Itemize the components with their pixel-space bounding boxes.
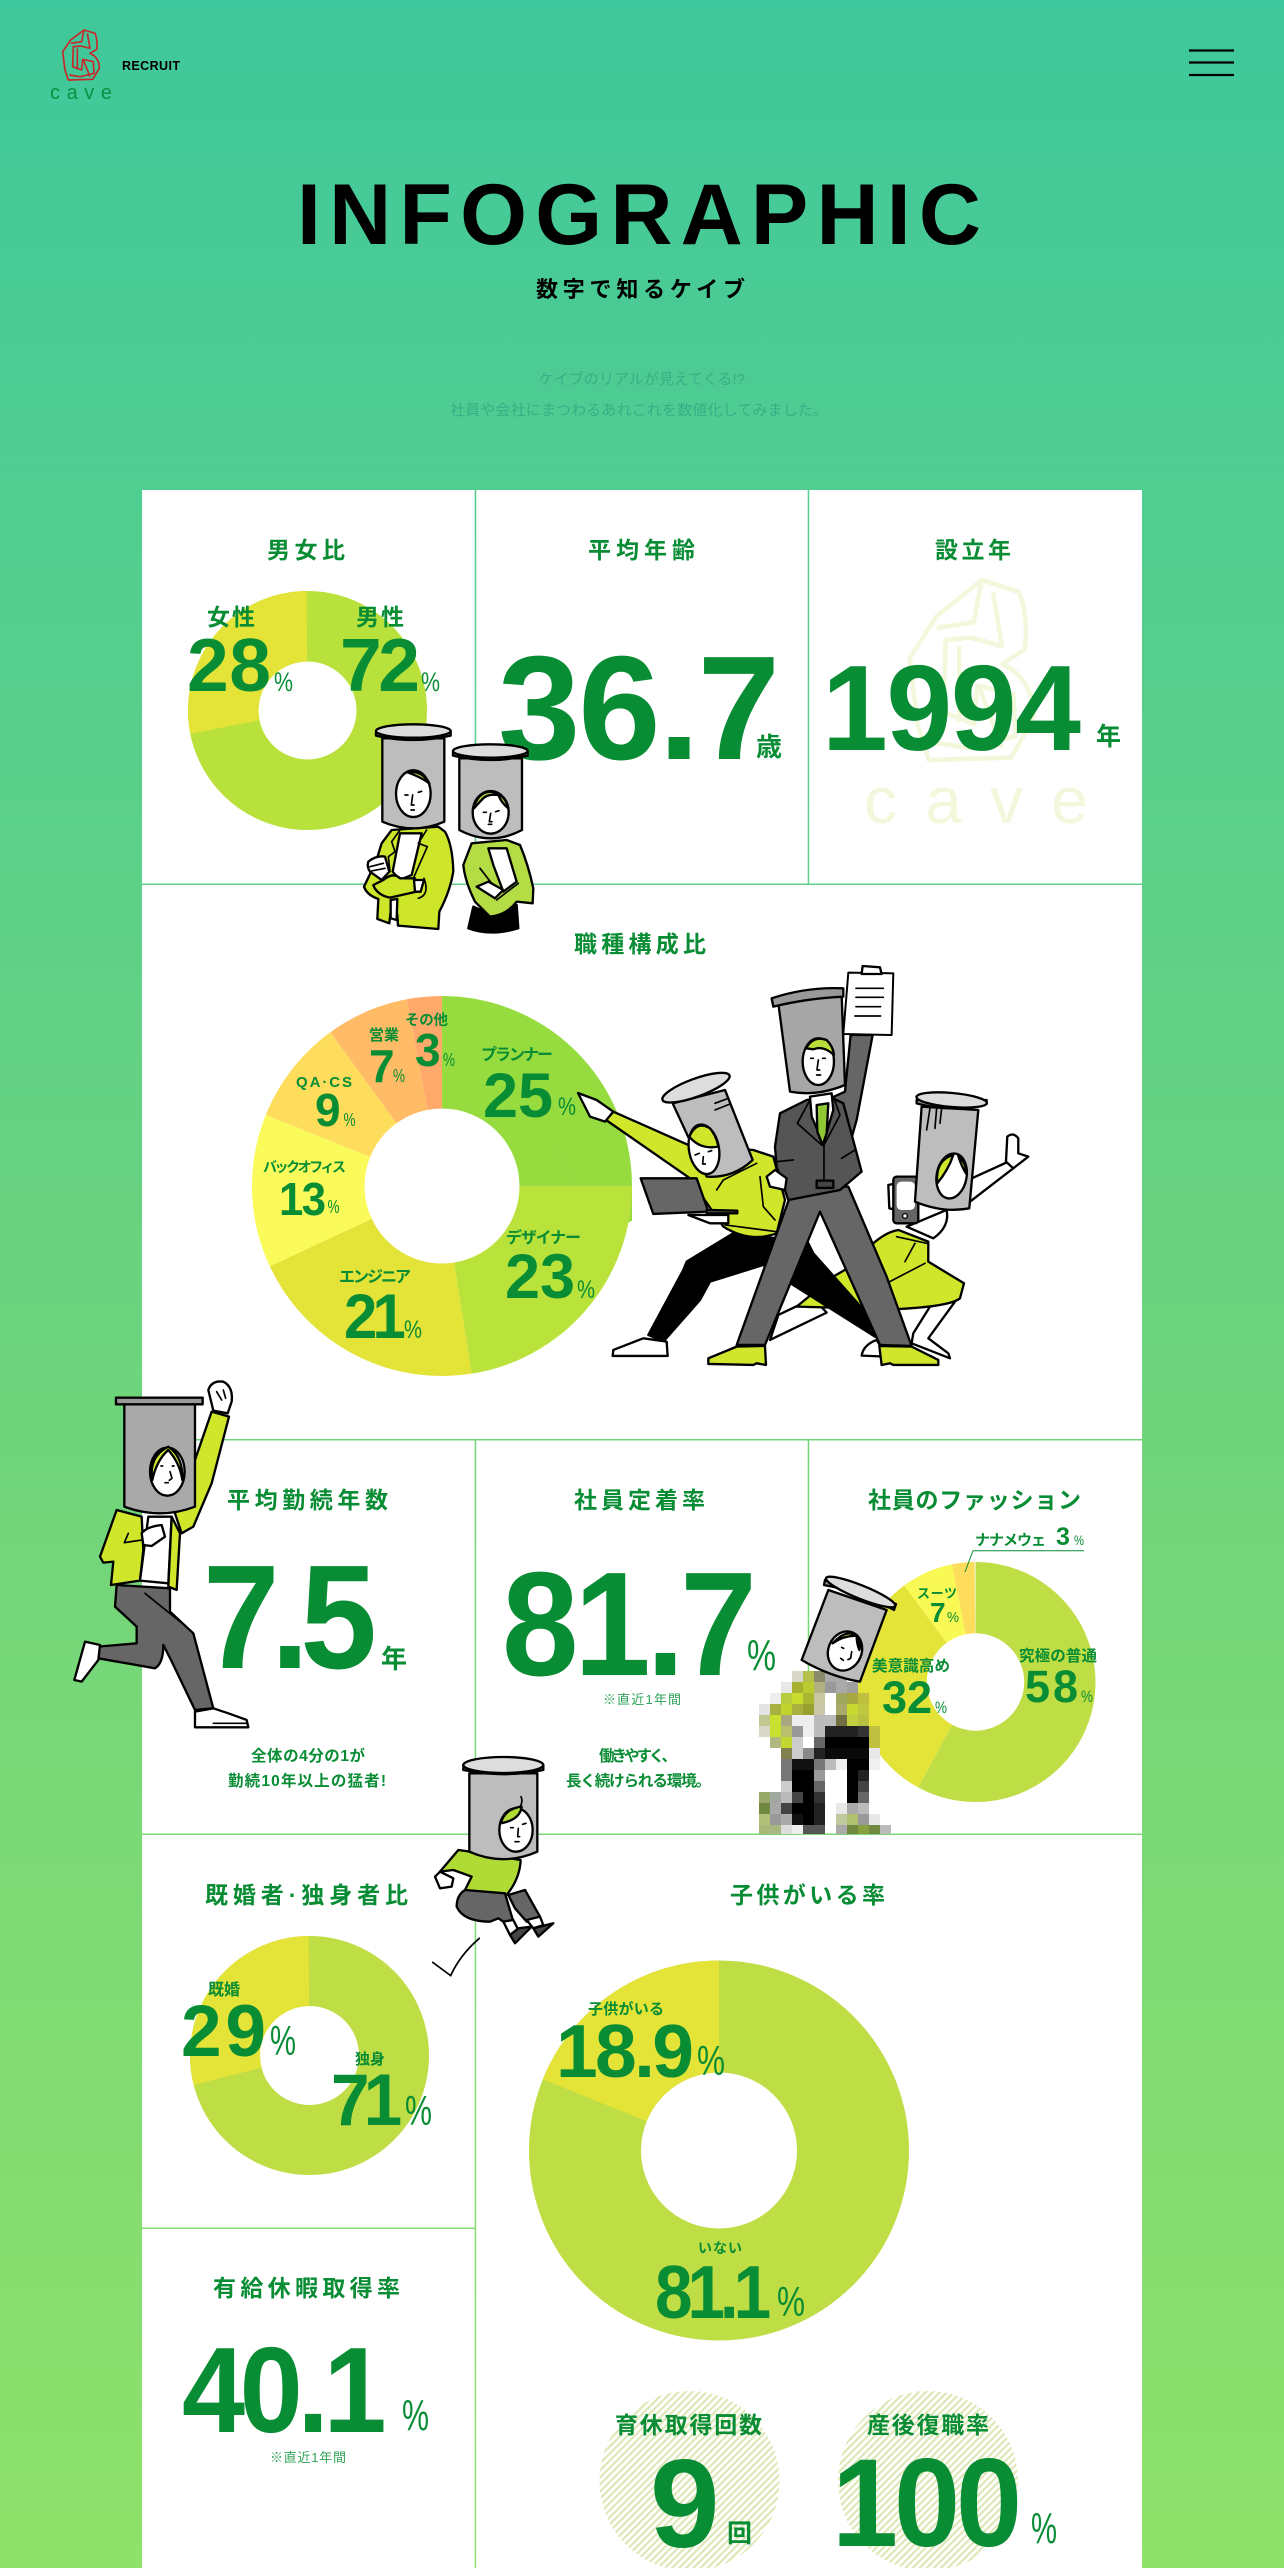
panel: children rate	[556, 1882, 885, 2335]
panel: staff fashion	[868, 1487, 1097, 1766]
label: male: %	[421, 667, 440, 697]
label: diagonal style callout: 3	[1056, 1523, 1070, 1551]
note: retention: 働きやすく、	[599, 1747, 677, 1765]
note: tenure	[228, 1746, 386, 1790]
grid lines	[142, 490, 1142, 2568]
note: retention	[566, 1747, 711, 1790]
label: married: 29	[181, 1991, 266, 2072]
label: fashion-conscious: %	[935, 1698, 947, 1717]
intro text	[450, 370, 828, 419]
panel: childcare leave count	[600, 2391, 780, 2568]
label: male: 男性	[356, 604, 404, 630]
label: planner: 25	[483, 1061, 553, 1131]
value: 1994: 1994	[822, 640, 1081, 776]
watermark logo: cave	[864, 763, 1088, 837]
label: suits: スーツ	[917, 1586, 957, 1601]
donut chart: marital status	[225, 1971, 394, 2140]
label: female: 女性	[207, 604, 255, 630]
illustration: mosaic censored staff	[759, 1572, 898, 1834]
figure: man in suit holding paper	[708, 966, 938, 1365]
label: female: %	[274, 667, 293, 697]
label: engineer: %	[404, 1316, 422, 1344]
intro text: 社員や会社にまつわるあれこれを数値化してみました。	[450, 402, 828, 419]
heading: job composition: 職種構成比	[574, 931, 706, 957]
label: designer: デザイナー	[506, 1228, 581, 1247]
figure: woman with smartphone	[770, 1090, 1028, 1358]
logo: cave recruit: cave	[50, 82, 112, 104]
white panel	[142, 490, 1142, 2568]
panel: average age	[498, 537, 782, 791]
label: engineer: 21	[344, 1282, 406, 1352]
label: diagonal style callout: %	[1074, 1532, 1084, 1548]
label: suits: %	[947, 1609, 959, 1626]
label: no children: 81.1	[655, 2251, 771, 2335]
icon: hamburger menu	[1189, 50, 1234, 75]
illustration: two bucket-head staff with folded arms	[364, 724, 533, 932]
illustration: running staff	[74, 1381, 248, 1727]
unit: age: 歳	[756, 732, 782, 762]
label: QA CS: %	[344, 1110, 356, 1130]
label: married	[181, 1981, 296, 2072]
donut chart: gender	[223, 626, 392, 795]
label: designer: 23	[505, 1242, 575, 1312]
label: back office: 13	[279, 1173, 326, 1225]
label: engineer: エンジニア	[339, 1269, 411, 1286]
donut chart: children	[585, 2016, 853, 2284]
title: INFOGRAPHIC	[297, 167, 981, 263]
label: married: %	[270, 2017, 296, 2064]
illustration: three bucket-head staff team	[578, 966, 1028, 1365]
watermark logo	[864, 580, 1088, 837]
logo: cave recruit: RECRUIT	[122, 59, 180, 73]
label: no children: いない	[698, 2240, 742, 2256]
unit: percent: %	[1031, 2504, 1057, 2553]
panel: paid leave rate	[182, 2275, 429, 2465]
label: ultimate normal	[1019, 1646, 1097, 1712]
label: suits: 7	[930, 1597, 946, 1628]
label: fashion-conscious	[872, 1657, 950, 1723]
label: diagonal style callout	[965, 1523, 1084, 1572]
label: ultimate normal: 58	[1025, 1661, 1078, 1712]
label: QA CS	[296, 1074, 356, 1136]
unit: years: 年	[381, 1644, 407, 1674]
heading: average tenure: 平均勤続年数	[227, 1487, 388, 1513]
unit: percent: %	[747, 1631, 776, 1680]
label: single: 独身	[355, 2050, 385, 2068]
label: sales	[369, 1026, 405, 1092]
label: female	[187, 604, 293, 707]
hatched circle	[600, 2391, 780, 2568]
note: tenure: 勤続10年以上の猛者!	[228, 1771, 386, 1790]
intro text: ケイブのリアルが見えてくる!?	[539, 370, 745, 388]
heading: average age: 平均年齢	[588, 537, 695, 563]
panel: retention rate	[502, 1487, 776, 1790]
value: 40.1: 40.1	[182, 2321, 387, 2458]
label: QA CS: 9	[315, 1084, 341, 1136]
label: QA CS: QA·CS	[296, 1074, 352, 1091]
note: tenure: 全体の4分の1が	[251, 1746, 365, 1765]
label: single: 71	[331, 2060, 402, 2141]
heading: founding year: 設立年	[935, 537, 1011, 563]
unit: year: 年	[1096, 723, 1121, 751]
label: planner: %	[558, 1093, 576, 1121]
panel: job composition	[263, 931, 706, 1352]
panel: founding year	[822, 537, 1121, 837]
value: 81.7: 81.7	[502, 1542, 757, 1707]
heading: childcare leave count: 育休取得回数	[615, 2412, 762, 2438]
value: 36.7: 36.7	[498, 626, 780, 791]
label: ultimate normal: 究極の普通	[1019, 1646, 1097, 1665]
label: fashion-conscious: 美意識高め	[872, 1657, 950, 1675]
donut chart: fashion	[891, 1598, 1060, 1766]
heading: return to work rate: 産後復職率	[867, 2412, 989, 2438]
label: diagonal style callout: ナナメウェ	[975, 1532, 1046, 1549]
unit: percent: %	[402, 2391, 429, 2440]
label: back office	[263, 1159, 346, 1225]
panel: marital status	[181, 1882, 432, 2141]
label: female: 28	[187, 623, 271, 707]
heading: retention rate: 社員定着率	[574, 1487, 705, 1513]
label: sales: 営業	[369, 1026, 399, 1044]
panel: return to work rate	[832, 2391, 1057, 2568]
logo: cave recruit	[50, 30, 180, 104]
label: fashion-conscious: 32	[882, 1672, 932, 1723]
footnote: paid leave: ※直近1年間	[270, 2450, 346, 2465]
heading: staff fashion: 社員のファッション	[868, 1487, 1081, 1513]
label: male: 72	[340, 623, 420, 707]
label: married: 既婚	[208, 1981, 240, 1999]
donut chart: job composition	[308, 1052, 576, 1320]
label: has children: 18.9	[556, 2009, 694, 2093]
note: retention: 長く続けられる環境。	[566, 1772, 711, 1790]
label: suits	[917, 1586, 959, 1628]
label: has children: %	[697, 2037, 725, 2084]
label: male	[340, 604, 440, 707]
figure: man pointing with laptop	[578, 1067, 875, 1356]
label: ultimate normal: %	[1081, 1687, 1093, 1706]
label: sales: %	[393, 1066, 405, 1086]
footnote: retention: ※直近1年間	[603, 1692, 681, 1707]
label: back office: %	[328, 1197, 340, 1217]
unit: times: 回	[727, 2520, 752, 2548]
label: back office: バックオフィス	[263, 1159, 346, 1175]
label: other	[405, 1012, 455, 1076]
heading: gender ratio: 男女比	[267, 537, 345, 563]
heading: children rate: 子供がいる率	[730, 1882, 885, 1908]
label: planner	[481, 1046, 576, 1131]
label: planner: プランナー	[481, 1046, 553, 1064]
label: no children: %	[777, 2278, 805, 2325]
label: no children	[655, 2240, 805, 2335]
label: single	[331, 2050, 432, 2141]
label: sales: 7	[369, 1040, 395, 1092]
heading: paid leave rate: 有給休暇取得率	[213, 2275, 400, 2301]
label: engineer	[339, 1269, 422, 1352]
panel: average tenure	[203, 1487, 407, 1790]
heading: marital status: 既婚者·独身者比	[205, 1882, 408, 1908]
value: 7.5: 7.5	[203, 1535, 377, 1700]
label: designer	[505, 1228, 595, 1312]
subtitle: 数字で知るケイブ	[536, 277, 745, 302]
label: single: %	[405, 2087, 432, 2134]
label: has children: 子供がいる	[588, 2000, 664, 2018]
label: designer: %	[577, 1276, 595, 1304]
illustration: jumping staff with check mark	[433, 1757, 553, 1976]
hatched circle	[838, 2391, 1018, 2568]
label: other: その他	[405, 1012, 448, 1029]
label: other: 3	[415, 1024, 441, 1076]
panel: gender ratio	[187, 537, 440, 795]
label: other: %	[443, 1050, 455, 1070]
